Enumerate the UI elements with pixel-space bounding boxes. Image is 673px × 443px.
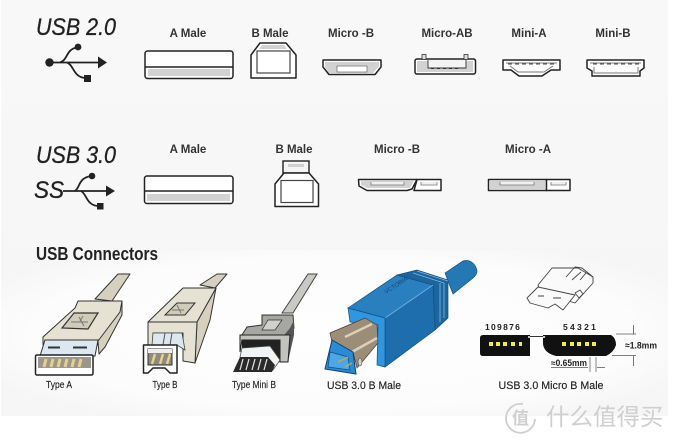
illustration: USB 3.0 B Male plug [325,261,477,374]
label: USB 3.0 Micro B Male: USB 3.0 Micro B Male [498,380,604,392]
label: A Male 3.0: A Male [170,144,206,156]
heading: USB 3.0: USB 3.0 [36,142,117,169]
label: Mini-A: Mini-A [511,28,547,40]
label: A Male 2.0: A Male [170,28,206,40]
connector: A Male 3.0 [144,176,233,204]
heading: USB Connectors: USB Connectors [36,244,158,264]
dimension: 1.8mm [612,325,657,366]
pin numbers: 5 to 1: 54321 [563,322,598,332]
label: Mini-B: Mini-B [595,28,631,40]
connector: Micro-B 3.0 [358,180,441,190]
heading: USB 2.0: USB 2.0 [36,14,117,41]
illustration: USB 3.0 B Male plug: VCTORIA [384,276,409,296]
label: USB 3.0 B Male: USB 3.0 B Male [327,380,401,392]
diagram: micro B pinout [480,335,616,356]
label: Micro-A 3.0: Micro -A [505,144,551,156]
label: Type A: Type A [46,380,72,391]
label: Type B: Type B [152,380,178,391]
icon: USB trident 2.0 [45,44,107,82]
connector: Micro-A 3.0 [488,180,570,190]
connector: B Male 3.0 [275,161,318,206]
illustration: Type Mini B plug [233,274,317,372]
dimension: 0.65mm: ≈0.65mm [551,358,587,368]
label: Micro-B 2.0: Micro -B [328,28,374,40]
connector: Mini-B [587,60,644,76]
pin numbers: 10 to 6: 109876 [485,322,521,332]
watermark [506,404,664,433]
connector: Mini-A [503,60,560,76]
icon: SS USB trident: SS [34,177,64,204]
label: Type Mini B: Type Mini B [232,380,276,391]
label: B Male 3.0: B Male [275,144,313,156]
icon: SS USB trident [34,173,115,210]
label: B Male 2.0: B Male [251,28,289,40]
connector: A Male 2.0 [145,51,233,78]
connector: Micro-B 2.0 [323,60,381,74]
dimension: 1.8mm: ≈1.8mm [625,340,657,352]
illustration: micro B line drawing [527,267,593,310]
dimension: 0.65mm [551,357,605,372]
watermark: 什么值得买 [546,404,664,430]
connector: Micro-AB [415,54,476,74]
label: Micro-B 3.0: Micro -B [374,144,420,156]
label: Micro-AB: Micro-AB [421,28,473,40]
illustration: Type B plug [144,274,227,373]
illustration: Type A plug [36,274,130,375]
connector: B Male 2.0 [251,43,296,78]
watermark: 值 [512,409,529,428]
